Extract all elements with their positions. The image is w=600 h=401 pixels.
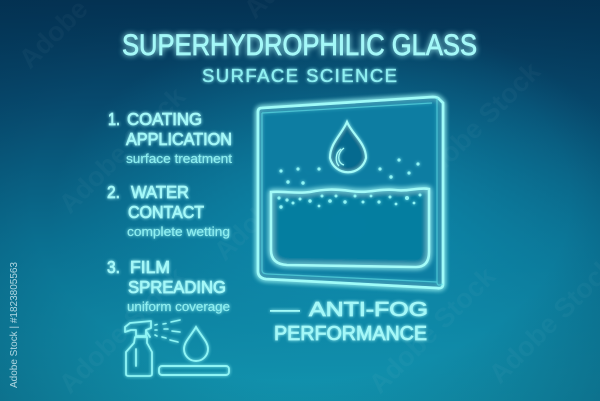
step 2 bbox=[107, 182, 230, 239]
step 3: 3. bbox=[107, 257, 120, 277]
subtitle: SURFACE SCIENCE bbox=[202, 65, 397, 86]
icon: spray mist bbox=[155, 320, 180, 342]
step 1 bbox=[108, 109, 233, 166]
anti-fog label bbox=[270, 299, 428, 345]
water drop bbox=[330, 122, 366, 172]
anti-fog label: PERFORMANCE bbox=[274, 323, 427, 345]
anti-fog label: ANTI-FOG bbox=[309, 299, 428, 321]
step 1: APPLICATION bbox=[126, 129, 232, 149]
watermark: Adobe Stock bbox=[363, 261, 502, 399]
watermark: Adobe Stock bbox=[53, 81, 192, 219]
watermark: Adobe Stock bbox=[408, 56, 547, 194]
glass side edge bbox=[262, 98, 443, 285]
stock id side text: Adobe Stock | #1823805563 bbox=[8, 262, 20, 388]
glass panel illustration bbox=[258, 97, 443, 288]
step 1: surface treatment bbox=[126, 152, 233, 166]
step 2: 2. bbox=[107, 182, 120, 202]
step 3: SPREADING bbox=[128, 277, 226, 297]
step 1: 1. bbox=[108, 109, 120, 129]
step 2: CONTACT bbox=[128, 202, 204, 222]
icon: flat plate bbox=[159, 366, 229, 375]
step 1: COATING bbox=[127, 109, 202, 129]
watermark: Adobe Stock bbox=[208, 128, 347, 266]
step 3: uniform coverage bbox=[127, 300, 230, 314]
watermark: Adobe Stock bbox=[53, 261, 192, 399]
icon: spray bottle bbox=[125, 321, 152, 376]
step 2: WATER bbox=[131, 182, 189, 202]
step 3: FILM bbox=[130, 257, 170, 277]
icon: small drop bbox=[184, 327, 208, 361]
droplets above water bbox=[279, 158, 420, 185]
title: SUPERHYDROPHILIC GLASS bbox=[122, 29, 477, 62]
glass outer frame bbox=[258, 97, 443, 288]
step 2: complete wetting bbox=[127, 225, 230, 239]
drop highlight bbox=[336, 148, 344, 166]
step 3 bbox=[107, 257, 230, 314]
water film bbox=[271, 189, 429, 267]
bubbles in water bbox=[277, 194, 422, 209]
